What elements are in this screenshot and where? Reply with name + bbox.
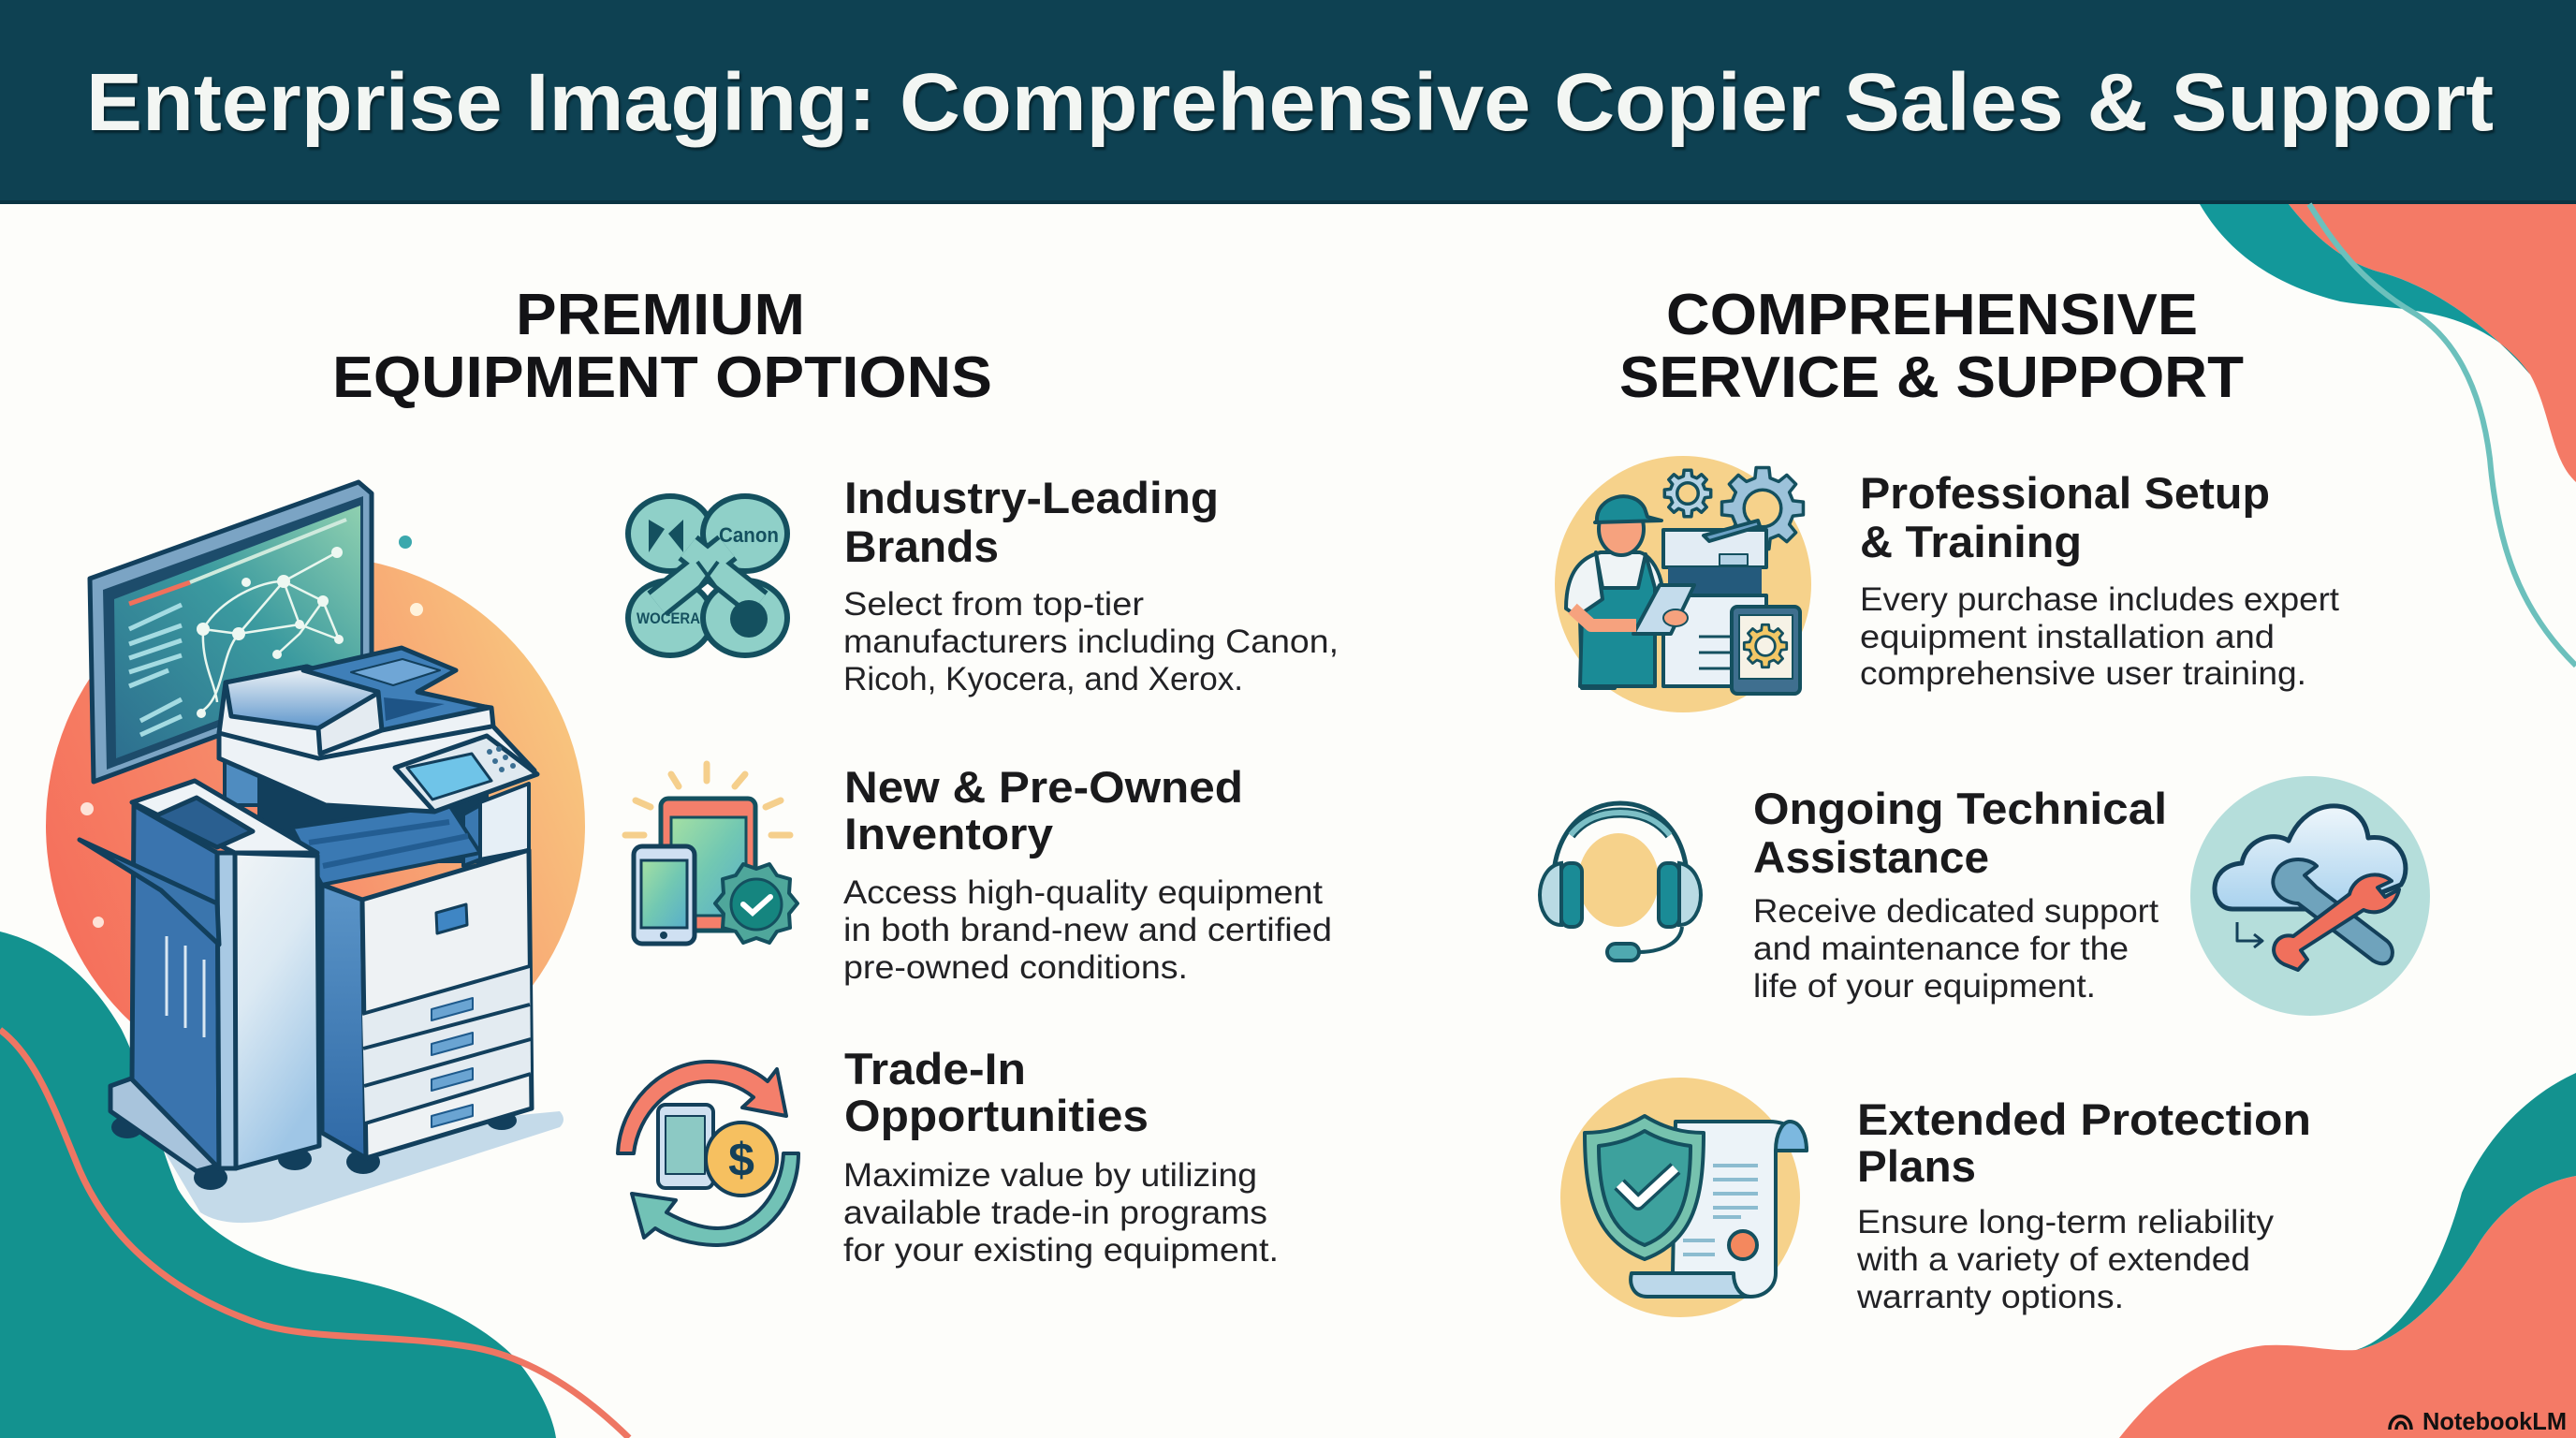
text: trade-in opportunities: for your existing equipment. (843, 1232, 1279, 1269)
decorative blobs: top right (2200, 204, 2576, 666)
document feeder (303, 648, 489, 730)
icon: brands (628, 496, 787, 655)
text: professional setup and training: & Training (1860, 517, 2082, 566)
floor shadow (163, 1111, 564, 1223)
text: industry-leading brands (843, 473, 1339, 697)
scanner unit (219, 667, 534, 812)
heading: comprehensive service and support: COMPREHENSIVE (1666, 283, 2198, 347)
icon: support headset (1540, 803, 1701, 961)
text: new and pre-owned inventory: New & Pre-Owned (844, 762, 1243, 812)
icon: technician with copier (1555, 456, 1811, 712)
wall monitor (90, 482, 372, 782)
text: trade-in opportunities: Trade-In (844, 1044, 1026, 1093)
text: industry-leading brands: Ricoh, Kyocera, and Xerox. (843, 661, 1243, 697)
title: Enterprise Imaging: Comprehensive Copier Sales & Support (86, 57, 2494, 148)
text: new and pre-owned inventory: Access high-quality equipment (843, 874, 1323, 911)
icon: shield and warranty document (1560, 1078, 1807, 1317)
text: professional setup and training: Every purchase includes expert (1860, 581, 2339, 618)
heading: comprehensive service and support (1619, 283, 2244, 410)
panel: premium equipment options (332, 283, 1339, 1269)
orange circle behind copier (46, 556, 585, 1095)
text: professional setup and training: comprehensive user training. (1860, 655, 2306, 692)
icon: cloud and wrenches (2190, 776, 2430, 1016)
text: industry-leading brands: Industry-Leading (844, 473, 1219, 522)
control panel (395, 736, 537, 812)
heading: comprehensive service and support: SERVICE & SUPPORT (1619, 345, 2244, 410)
accent dots (80, 536, 423, 928)
header band (0, 0, 2576, 204)
text: ongoing technical assistance: and maintenance for the (1753, 931, 2129, 967)
text: professional setup and training: Professional Setup (1860, 468, 2270, 518)
text: trade-in opportunities: Opportunities (844, 1091, 1149, 1140)
finisher unit (80, 781, 319, 1171)
text: ongoing technical assistance: Assistance (1753, 832, 1989, 882)
heading: premium equipment options: PREMIUM (516, 283, 805, 347)
text: ongoing technical assistance (1753, 784, 2167, 1005)
copier wheels (111, 1111, 517, 1190)
icon: brands: WOCERA (637, 609, 700, 627)
copier neck and inner cavity (225, 749, 529, 866)
icon: trade-in cycle (618, 1062, 798, 1245)
text: professional setup and training: equipment installation and (1860, 619, 2275, 655)
text: new and pre-owned inventory: Inventory (844, 809, 1053, 858)
text: new and pre-owned inventory: pre-owned conditions. (843, 949, 1188, 986)
icon: brands: Canon (719, 523, 779, 547)
output tray (292, 805, 480, 885)
panel: comprehensive service and support (1540, 283, 2430, 1317)
heading: premium equipment options: EQUIPMENT OPTIONS (332, 345, 992, 410)
NotebookLM logo: NotebookLM (2422, 1407, 2567, 1435)
text: extended protection plans: Plans (1857, 1141, 1976, 1191)
text: ongoing technical assistance: Receive dedicated support (1753, 893, 2159, 930)
icon: new and pre-owned devices (625, 764, 798, 944)
text: extended protection plans: warranty options. (1856, 1279, 2124, 1315)
text: extended protection plans: Extended Protection (1857, 1094, 2311, 1144)
text: industry-leading brands: Select from top-tier (843, 586, 1144, 623)
text: trade-in opportunities: Maximize value by utilizing (843, 1157, 1257, 1194)
decorative blob: bottom left (0, 932, 629, 1438)
text: extended protection plans (1856, 1094, 2311, 1315)
heading: premium equipment options (332, 283, 992, 410)
text: extended protection plans: with a variety of extended (1856, 1241, 2250, 1278)
text: professional setup and training (1860, 468, 2339, 692)
text: trade-in opportunities (843, 1044, 1279, 1269)
text: industry-leading brands: manufacturers including Canon, (843, 624, 1339, 660)
main body front with drawers (362, 850, 532, 1158)
text: extended protection plans: Ensure long-term reliability (1857, 1204, 2275, 1240)
text: ongoing technical assistance: Ongoing Technical (1753, 784, 2167, 833)
text: ongoing technical assistance: life of your equipment. (1753, 968, 2096, 1005)
text: trade-in opportunities: available trade-in programs (843, 1195, 1267, 1231)
text: new and pre-owned inventory: in both brand-new and certified (843, 912, 1332, 948)
main body left side (322, 885, 366, 1158)
illustration: copier with monitor (80, 482, 564, 1223)
decorative blobs: bottom right (2119, 1073, 2576, 1438)
text: new and pre-owned inventory (843, 762, 1332, 986)
text: industry-leading brands: Brands (844, 521, 999, 571)
icon: trade-in cycle: $ (728, 1134, 754, 1186)
